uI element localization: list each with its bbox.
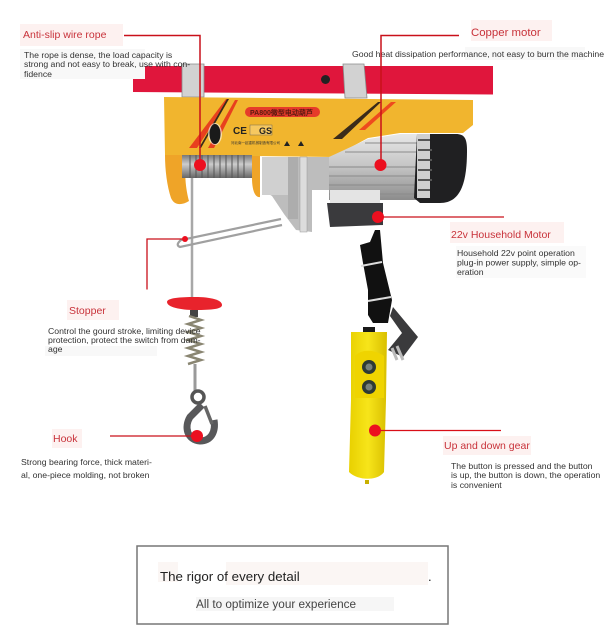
heading: Anti-slip wire rope [23, 29, 107, 41]
hoist product photo: 河北南一起重机械制造有限公司 [231, 140, 280, 145]
callout: copper motor [352, 20, 604, 171]
description: The rope is dense, the load capacity is [24, 50, 173, 60]
beam label [245, 107, 320, 117]
hoist product photo [133, 64, 493, 484]
heading: Stopper [69, 305, 106, 317]
motor end cap [414, 134, 467, 203]
leader line [378, 216, 504, 218]
leader line [147, 239, 185, 290]
motor fins [329, 134, 420, 200]
description: The button is pressed and the button [451, 461, 593, 471]
beam icons [284, 141, 304, 146]
yellow controller [349, 332, 387, 479]
right drum flange [252, 156, 260, 197]
leader line [375, 430, 501, 432]
stopper arm [178, 219, 282, 247]
left drum flange [165, 155, 189, 204]
heading: Up and down gear [444, 440, 530, 452]
beam stripes [189, 99, 396, 148]
callout: household motor: eration [457, 267, 484, 277]
controller buttons [362, 360, 376, 394]
heading: 22v Household Motor [451, 229, 551, 241]
leader line [381, 36, 459, 165]
leader line [124, 36, 200, 165]
power cable [360, 230, 392, 323]
leader line [110, 435, 197, 437]
wire rope [191, 178, 193, 298]
callout: up and down gear: is up, the button is down, the operation [451, 470, 600, 480]
rail clamps [182, 64, 367, 98]
heading: Copper motor [471, 27, 541, 39]
callout: stopper: age [48, 344, 63, 354]
switch box [330, 190, 380, 204]
red stopper disc [167, 297, 222, 310]
callout: anti-slip wire rope [20, 24, 206, 171]
red rail [133, 66, 493, 94]
hoist product photo: GS [259, 126, 272, 136]
description: Control the gourd stroke, limiting device [48, 326, 201, 336]
heading: Hook [53, 433, 78, 445]
description: Household 22v point operation [457, 248, 575, 258]
plug [388, 307, 418, 357]
yellow beam [164, 97, 473, 157]
hoist product photo: PA800微型电动葫芦 [250, 108, 313, 117]
controller neck [363, 327, 375, 338]
callout: hook: al, one-piece molding, not broken [21, 470, 150, 480]
gearbox [262, 157, 332, 232]
callout: anti-slip wire rope: fidence [24, 69, 52, 79]
CE GS marks: CE [233, 126, 247, 137]
spring [188, 316, 201, 364]
summary box [137, 546, 448, 624]
callout: household motor [372, 211, 586, 278]
summary box: . [428, 569, 432, 584]
description: Good heat dissipation performance, not easy to burn the machine [352, 49, 604, 59]
wire drum [182, 155, 252, 178]
hook [187, 391, 214, 441]
description: Strong bearing force, thick materi- [21, 457, 152, 467]
callout: up and down gear: is convenient [451, 480, 502, 490]
summary subtext: All to optimize your experience [196, 598, 356, 611]
callout: stopper [45, 236, 201, 356]
summary heading: The rigor of every detail [160, 569, 300, 584]
cable ties [361, 262, 391, 301]
callout: hook [21, 429, 203, 480]
callout: anti-slip wire rope: strong and not easy to break, use with con- [24, 59, 190, 69]
callout: up and down gear [369, 424, 600, 490]
callout: household motor: plug-in power supply, simple op- [457, 258, 581, 268]
callout: stopper: protection, protect the switch from dam- [48, 335, 201, 345]
beam slot [208, 123, 222, 145]
